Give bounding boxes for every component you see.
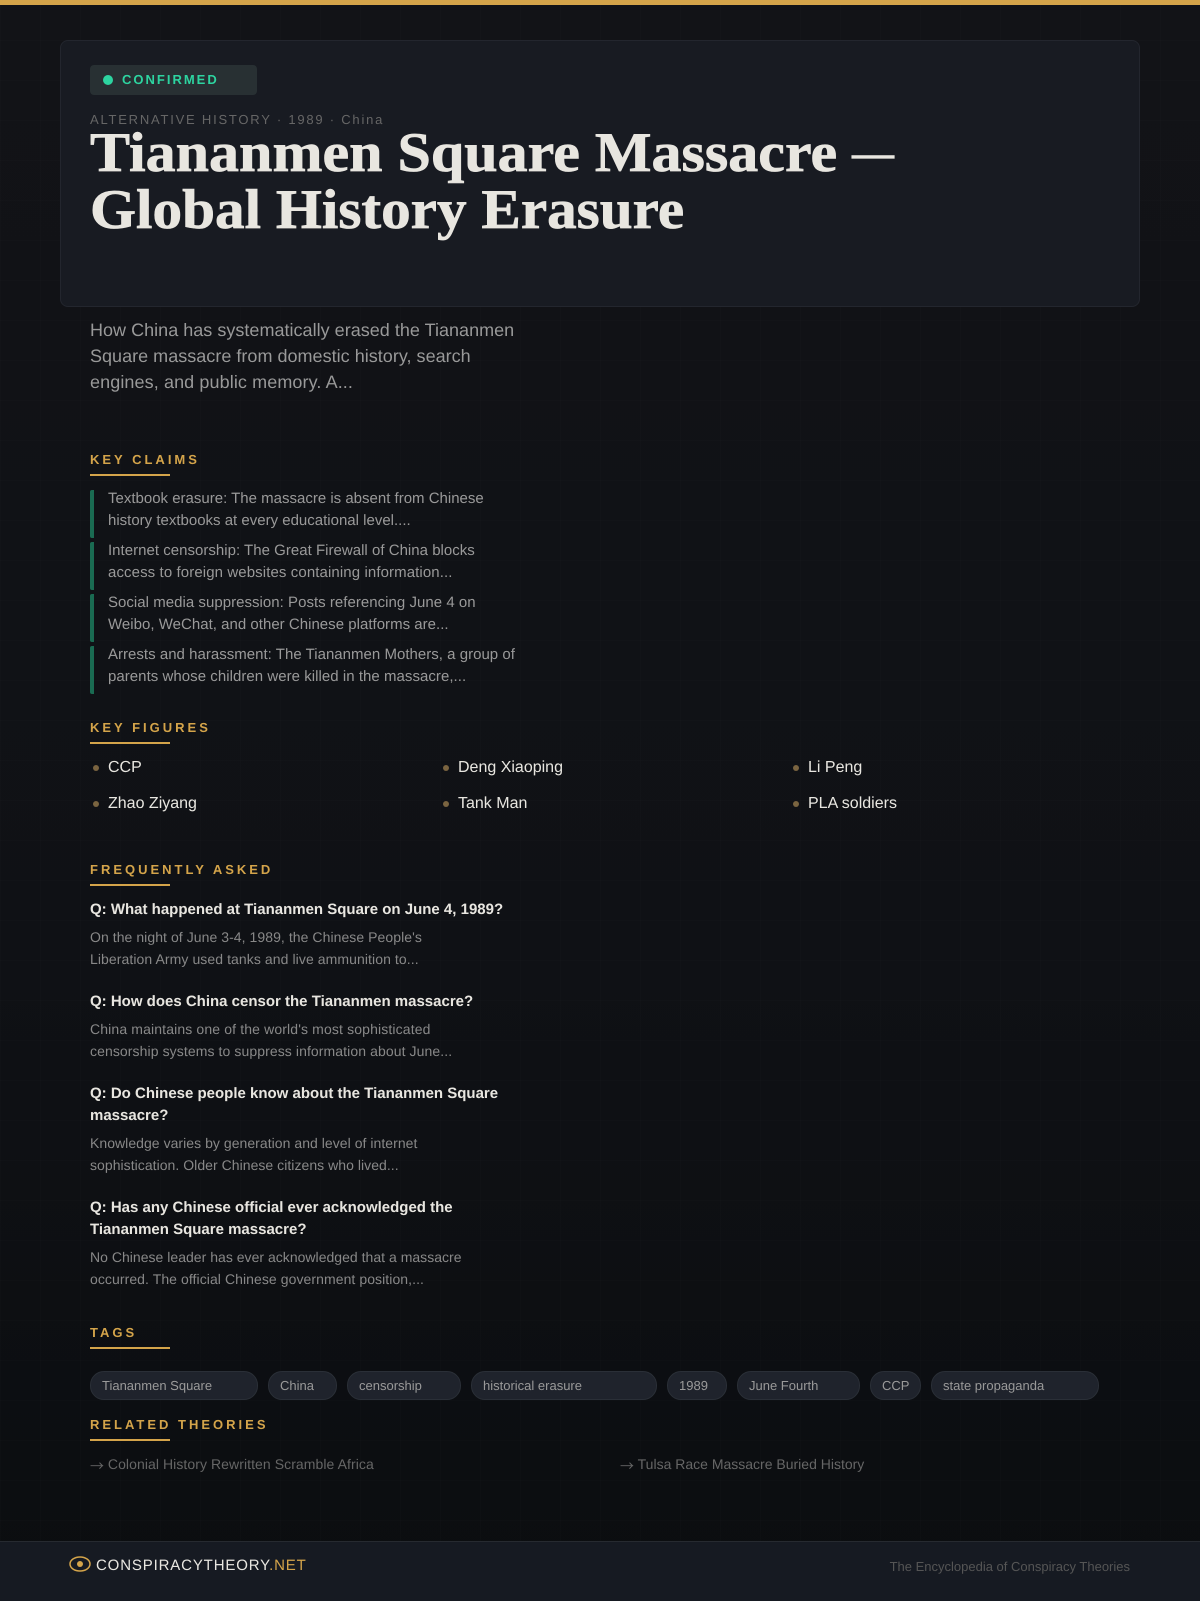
- claim: arrests and harassment: parents whose children were killed in the massacre,...: [108, 668, 466, 685]
- heading: tags: TAGS: [90, 1325, 137, 1340]
- faq item 4: Tiananmen Square massacre?: [90, 1221, 306, 1238]
- description: engines, and public memory. A...: [90, 372, 353, 392]
- figure: Deng Xiaoping: Deng Xiaoping: [458, 759, 563, 776]
- tag: [268, 1371, 337, 1400]
- faq item 2: [90, 993, 473, 1059]
- heading: key claims: KEY CLAIMS: [90, 452, 200, 467]
- panel: key figures grid: [93, 759, 897, 812]
- footer tagline: The Encyclopedia of Conspiracy Theories: [890, 1559, 1130, 1574]
- tag: 1989: [679, 1378, 708, 1393]
- icon: eye logo: [69, 1556, 91, 1572]
- faq item 1: On the night of June 3-4, 1989, the Chinese People's: [90, 929, 422, 945]
- claim: social media suppression: Weibo, WeChat, and other Chinese platforms are...: [108, 616, 449, 633]
- heading: key figures: KEY FIGURES: [90, 720, 211, 735]
- faq item 4: Q: Has any Chinese official ever acknowledged the: [90, 1199, 453, 1216]
- panel: hero header: [60, 40, 1140, 307]
- faq item 2: China maintains one of the world's most sophisticated: [90, 1021, 431, 1037]
- status badge: confirmed: [90, 65, 257, 95]
- faq item 1: Q: What happened at Tiananmen Square on June 4, 1989?: [90, 901, 503, 918]
- faq item 3: massacre?: [90, 1107, 168, 1124]
- tag: [347, 1371, 461, 1400]
- figure: Li Peng: Li Peng: [808, 759, 862, 776]
- panel: key claims list: [90, 490, 515, 694]
- faq item 3: Knowledge varies by generation and level of internet: [90, 1135, 417, 1151]
- claim: textbook erasure: [90, 490, 540, 538]
- tag: [667, 1371, 727, 1400]
- faq item 3: Q: Do Chinese people know about the Tiananmen Square: [90, 1085, 498, 1102]
- figure: Tank Man: Tank Man: [458, 795, 527, 812]
- tag: [737, 1371, 860, 1400]
- tag: [471, 1371, 657, 1400]
- footer: [0, 1541, 1200, 1601]
- tag: state propaganda: [943, 1378, 1044, 1393]
- badge label: CONFIRMED: [122, 72, 219, 87]
- faq item 3: [90, 1085, 498, 1173]
- related link: tulsa: → Tulsa Race Massacre Buried History: [620, 1456, 864, 1476]
- claim: arrests and harassment: Arrests and harassment: The Tiananmen Mothers, a group of: [108, 646, 515, 663]
- badge dot: [103, 75, 113, 85]
- figure: Zhao Ziyang: Zhao Ziyang: [108, 795, 197, 812]
- title: Tiananmen Square Massacre —: [90, 122, 894, 184]
- faq item 1: [90, 901, 503, 967]
- claim: textbook erasure: history textbooks at every educational level....: [108, 512, 411, 529]
- tag: [931, 1371, 1099, 1400]
- tag: June Fourth: [749, 1378, 818, 1393]
- tag: [90, 1371, 258, 1400]
- faq item 4: [90, 1199, 462, 1287]
- heading: related theories: RELATED THEORIES: [90, 1417, 268, 1432]
- tag: Tiananmen Square: [102, 1378, 212, 1393]
- faq item 2: Q: How does China censor the Tiananmen massacre?: [90, 993, 473, 1010]
- figure: CCP: [93, 759, 142, 776]
- figure: PLA soldiers: PLA soldiers: [808, 795, 897, 812]
- claim: textbook erasure: Textbook erasure: The massacre is absent from Chinese: [108, 490, 484, 507]
- claim: arrests and harassment: [90, 646, 540, 694]
- title: [90, 122, 895, 241]
- heading: frequently asked: FREQUENTLY ASKED: [90, 862, 273, 877]
- claim: internet censorship: Internet censorship: The Great Firewall of China blocks: [108, 542, 475, 559]
- category meta line: ALTERNATIVE HISTORY · 1989 · China: [90, 112, 384, 127]
- tag: CCP: [882, 1378, 909, 1393]
- claim: social media suppression: Social media suppression: Posts referencing June 4 on: [108, 594, 476, 611]
- faq item 1: Liberation Army used tanks and live ammunition to...: [90, 951, 419, 967]
- description: [90, 320, 514, 392]
- related link: colonial history: → Colonial History Rewritten Scramble Africa: [90, 1456, 374, 1476]
- tag: China: [280, 1378, 314, 1393]
- description: How China has systematically erased the Tiananmen: [90, 320, 514, 340]
- brand wordmark: CONSPIRACYTHEORY.NET: [96, 1557, 307, 1574]
- claim: internet censorship: [90, 542, 540, 590]
- faq item 2: censorship systems to suppress information about June...: [90, 1043, 452, 1059]
- tag: censorship: [359, 1378, 422, 1393]
- faq item 4: occurred. The official Chinese government position,...: [90, 1271, 424, 1287]
- tag: [870, 1371, 921, 1400]
- faq item 3: sophistication. Older Chinese citizens who lived...: [90, 1157, 399, 1173]
- description: Square massacre from domestic history, search: [90, 346, 471, 366]
- title: Global History Erasure: [90, 179, 684, 241]
- tag: historical erasure: [483, 1378, 582, 1393]
- claim: internet censorship: access to foreign websites containing information...: [108, 564, 453, 581]
- faq item 4: No Chinese leader has ever acknowledged that a massacre: [90, 1249, 462, 1265]
- figure: CCP: CCP: [108, 759, 142, 776]
- claim: social media suppression: [90, 594, 540, 642]
- top accent bar: [0, 0, 1200, 5]
